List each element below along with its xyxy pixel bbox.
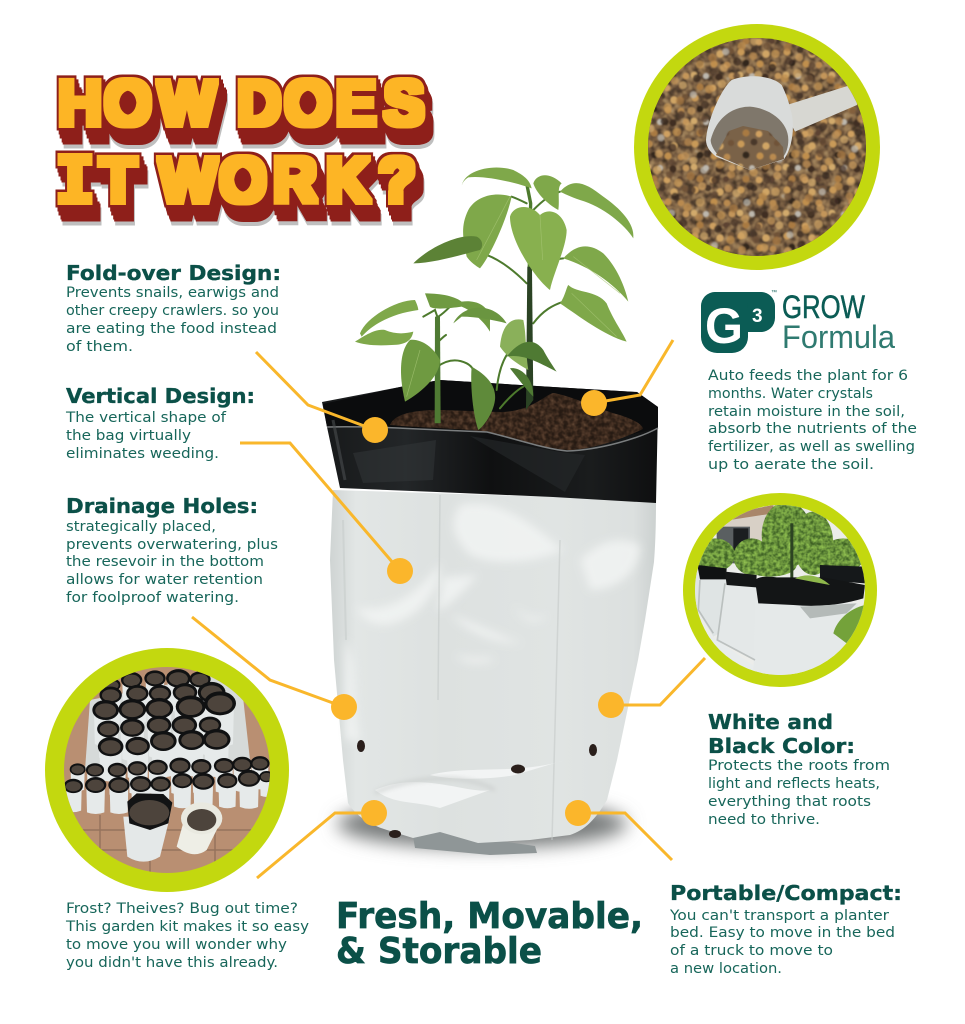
text block: drainage holes: for foolproof watering. — [66, 590, 239, 606]
text block: drainage holes: Drainage Holes: — [66, 494, 258, 518]
text block: frost and thieves: This garden kit makes it so easy — [65, 919, 309, 935]
logo: G3 Grow Formula: GROW — [782, 289, 866, 325]
logo: G3 Grow Formula: G — [705, 298, 743, 354]
white bag body — [330, 490, 656, 843]
text block: white and black color: Protects the roots from — [708, 758, 890, 774]
callout connector: grow formula — [581, 340, 673, 416]
text block: white and black color: light and reflects heats, — [708, 776, 880, 792]
text block: frost and thieves: to move you will wonder why — [66, 937, 287, 953]
logo: G3 Grow Formula: Formula — [782, 319, 895, 355]
title: how does it work: IT WORK? — [67, 145, 416, 216]
callout connector: frost and thieves — [257, 800, 387, 878]
callout connector: white and black color — [598, 658, 705, 718]
text block: vertical design: eliminates weeding. — [66, 446, 219, 462]
text block: portable compact: You can't transport a planter — [669, 908, 889, 924]
text block: grow formula description: Auto feeds the plant for 6 — [708, 368, 908, 384]
text block: vertical design — [65, 384, 255, 462]
bag base cardboard — [413, 828, 537, 855]
scoop heap of fertilizer — [716, 126, 784, 170]
callout connector: vertical design — [240, 443, 413, 584]
ground shadow — [337, 800, 627, 848]
title: how does it work: HOW DOES — [58, 68, 424, 139]
heading: fresh movable storable: Fresh, Movable, — [336, 896, 643, 937]
grow bag with plants — [322, 167, 658, 855]
text block: frost and thieves: Frost? Theives? Bug out time? — [66, 901, 298, 917]
text block: portable compact: of a truck to move to — [670, 943, 833, 959]
text block: white and black color: Black Color: — [708, 734, 855, 758]
text block: vertical design: the bag virtually — [66, 428, 191, 444]
text block: portable compact — [669, 881, 902, 977]
plants — [355, 167, 633, 430]
text block: frost and thieves: you didn't have this already. — [66, 955, 278, 971]
text block: drainage holes: the resevoir in the bottom — [66, 554, 264, 570]
text block: frost and thieves — [65, 901, 309, 971]
far right collars — [820, 565, 865, 583]
photo circle: fertilizer and scoop — [634, 24, 880, 270]
text block: drainage holes: strategically placed, — [66, 519, 216, 535]
photo circle: white and black bags in a row — [683, 493, 877, 687]
logo: G3 Grow Formula: 3 — [752, 306, 763, 327]
text block: grow formula description: absorb the nutrients of the — [708, 421, 917, 437]
text block: portable compact: bed. Easy to move in the bed — [670, 925, 895, 941]
text block: grow formula description: retain moisture in the soil, — [708, 404, 905, 420]
title: how does it work — [58, 68, 424, 216]
callout connector: drainage holes — [192, 617, 357, 720]
text block: drainage holes: allows for water retention — [66, 572, 263, 588]
text block: white and black color: everything that roots — [708, 794, 871, 810]
drainage holes — [357, 740, 597, 838]
text block: portable compact: a new location. — [670, 961, 782, 977]
logo: G3 Grow Formula: ™ — [771, 289, 777, 296]
text block: grow formula description: fertilizer, as well as swelling — [708, 439, 915, 455]
bag folds — [343, 495, 640, 840]
heading: fresh movable storable — [336, 896, 643, 972]
text block: fold-over design: other creepy crawlers. so you — [66, 303, 279, 319]
black collar — [322, 380, 658, 503]
text block: white and black color: White and — [708, 710, 833, 734]
collar inner and soil — [323, 380, 658, 450]
heading: fresh movable storable: & Storable — [336, 931, 542, 972]
text block: fold-over design: of them. — [66, 339, 133, 355]
text block: white and black color: need to thrive. — [708, 812, 820, 828]
callout connector: fold-over design — [256, 352, 388, 443]
text block: grow formula description: months. Water crystals — [708, 386, 873, 402]
text block: drainage holes — [66, 494, 278, 606]
text block: vertical design: The vertical shape of — [65, 410, 227, 426]
text block: fold-over design: are eating the food instead — [66, 321, 277, 337]
text block: white and black color — [708, 710, 890, 828]
text block: fold-over design — [66, 261, 281, 355]
text block: portable compact: Portable/Compact: — [670, 881, 902, 905]
text block: grow formula description — [708, 368, 917, 473]
photo circle: many grow bags on paving — [45, 648, 289, 892]
text block: drainage holes: prevents overwatering, plus — [66, 537, 278, 553]
text block: fold-over design: Fold-over Design: — [66, 261, 281, 285]
text block: fold-over design: Prevents snails, earwigs and — [66, 285, 279, 301]
text block: grow formula description: up to aerate the soil. — [708, 457, 874, 473]
callout connector: portable — [565, 800, 672, 860]
text block: vertical design: Vertical Design: — [66, 384, 255, 408]
logo: G3 Grow Formula — [701, 289, 895, 355]
